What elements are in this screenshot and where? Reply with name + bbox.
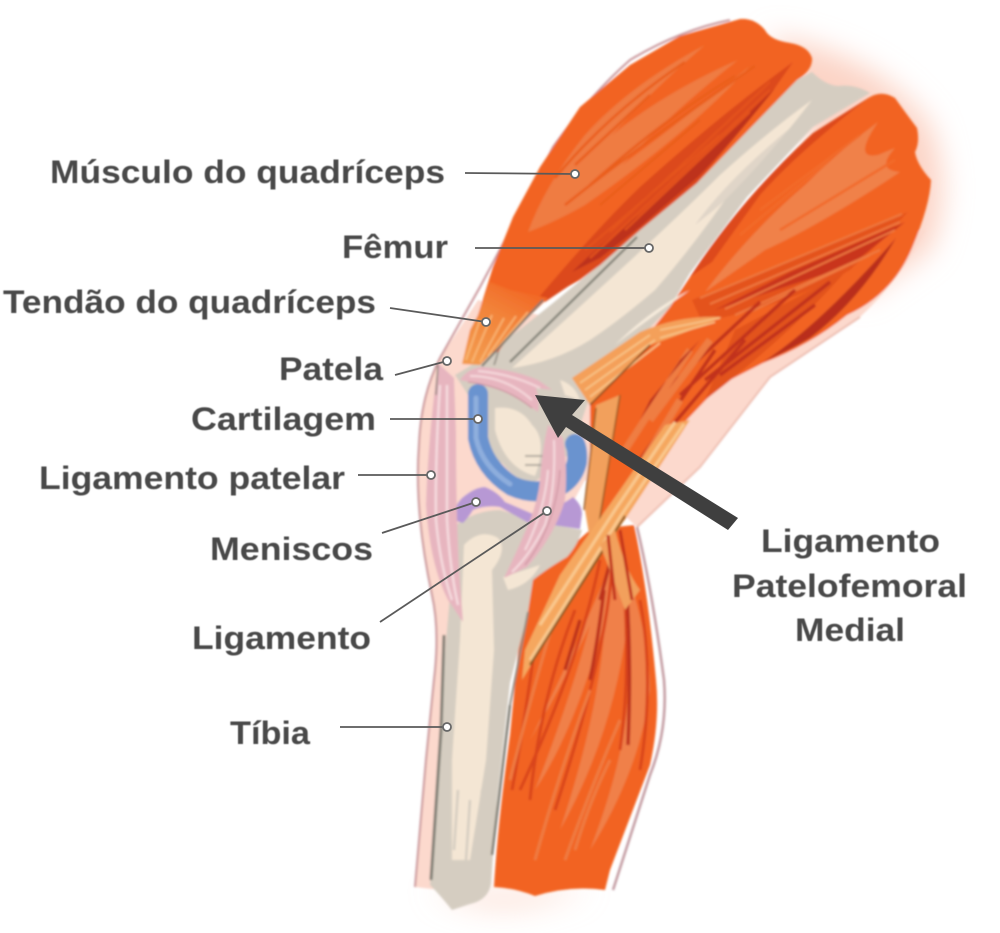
purple meniscus — [453, 487, 582, 529]
knee illustration — [415, 19, 931, 910]
calf muscle — [494, 525, 657, 896]
labels — [3, 154, 967, 751]
labels: Ligamento — [192, 620, 371, 656]
labels: Medial — [795, 612, 905, 648]
labels: Patelofemoral — [732, 568, 967, 604]
labels: Fêmur — [342, 229, 448, 265]
hamstring tendons — [522, 395, 690, 680]
soft skin glow — [430, 35, 942, 910]
medial collateral ligament — [504, 425, 566, 578]
right thigh muscle — [590, 94, 931, 535]
leader lines — [340, 173, 649, 727]
labels: Ligamento patelar — [39, 460, 345, 496]
labels: Tendão do quadríceps — [3, 284, 376, 320]
labels: Patela — [279, 351, 383, 387]
arrow — [535, 395, 738, 530]
blue cartilage — [476, 394, 577, 491]
labels: Ligamento — [761, 523, 940, 559]
highlights — [705, 122, 900, 292]
medial patellofemoral ligament — [460, 367, 552, 412]
lateral tendon — [572, 317, 722, 405]
labels: Meniscos — [210, 531, 373, 567]
femur bone — [455, 72, 870, 485]
label markers — [427, 170, 653, 731]
upper quadriceps muscle — [465, 19, 812, 352]
labels: Músculo do quadríceps — [50, 154, 445, 190]
quadriceps tendon — [462, 282, 548, 366]
patellar ligament — [426, 363, 463, 622]
tibia bone — [430, 510, 582, 910]
labels: Cartilagem — [191, 401, 376, 437]
labels: Tíbia — [230, 715, 310, 751]
skin layer — [415, 20, 925, 890]
